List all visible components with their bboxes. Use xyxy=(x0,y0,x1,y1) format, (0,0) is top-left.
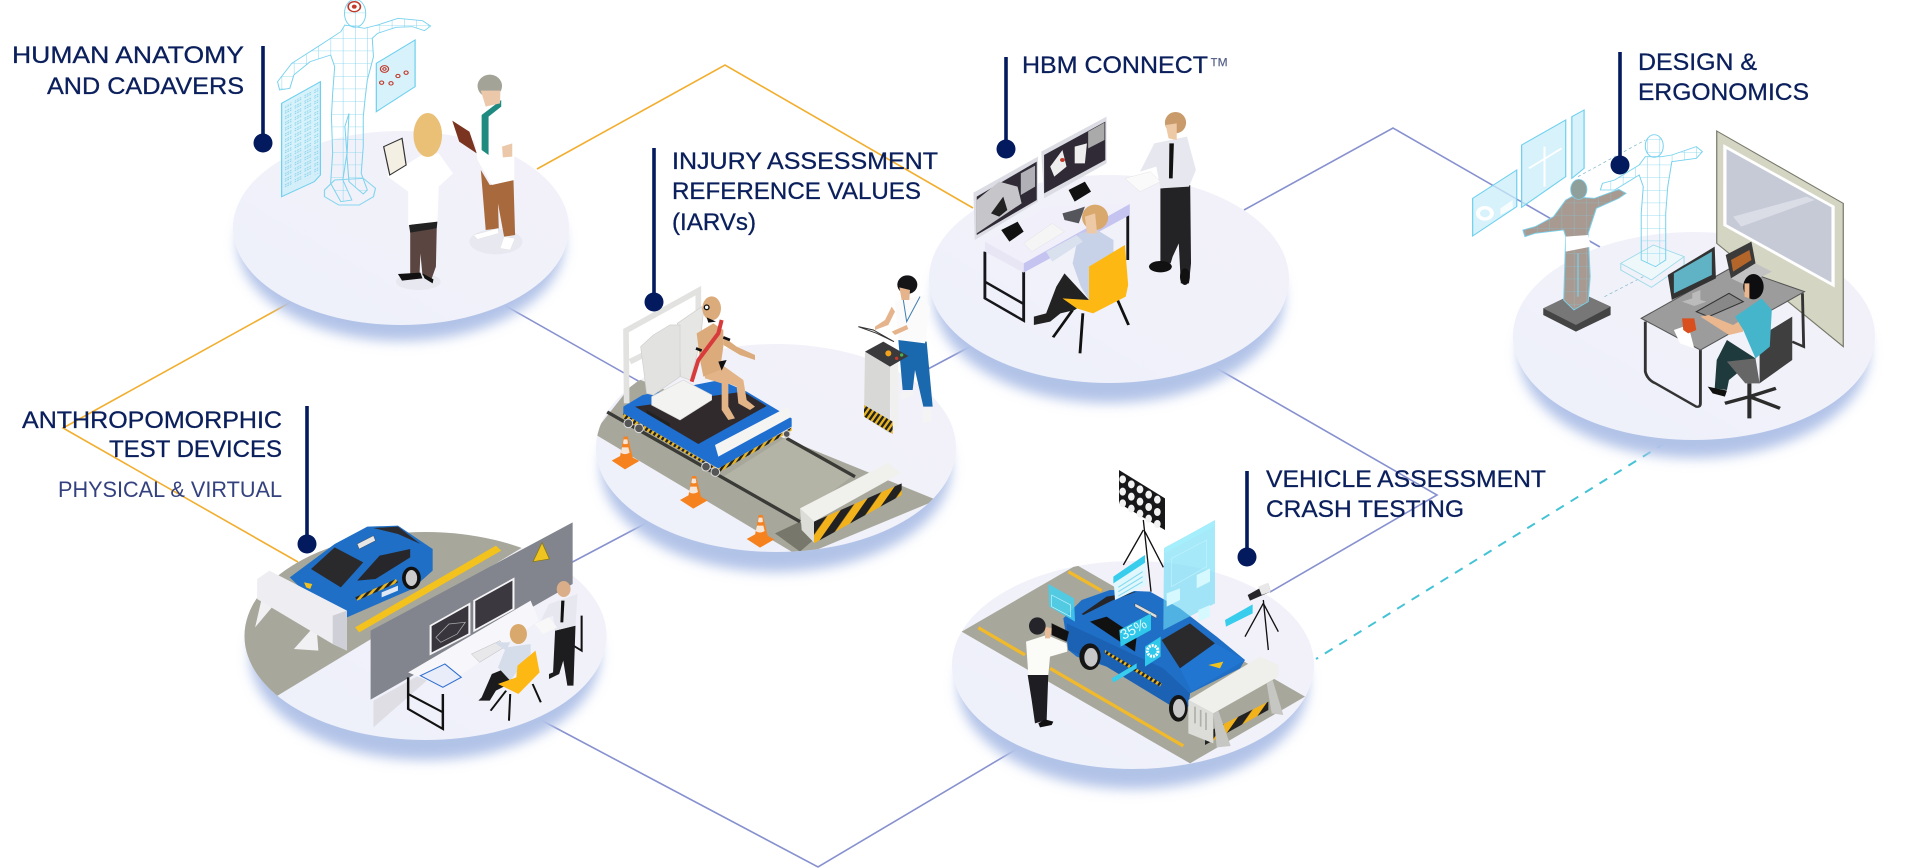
panel: vehicle assessment disc xyxy=(952,470,1314,789)
test track road xyxy=(593,378,937,557)
figure: engineer with tablet xyxy=(1026,617,1069,727)
pin: injury assessment xyxy=(644,148,664,312)
icon: physical body scan figure on dark platform xyxy=(1523,179,1626,332)
figure: standing engineer xyxy=(535,581,582,686)
blue crash test car xyxy=(290,526,433,617)
light array on tripod xyxy=(1119,470,1165,592)
sled platform xyxy=(623,380,792,476)
blue crash test vehicle xyxy=(1063,590,1245,722)
crash test dummy with seat belt xyxy=(692,296,755,420)
subheading: physical and virtual: PHYSICAL & VIRTUAL xyxy=(58,477,282,502)
road surface xyxy=(244,532,522,696)
figure: female doctor xyxy=(384,113,453,290)
heading: human anatomy and cadavers: HUMAN ANATOMY xyxy=(12,42,244,69)
panel: human anatomy and cadavers disc xyxy=(233,0,569,341)
heading: injury assessment reference values: INJURY ASSESSMENT xyxy=(672,148,938,175)
pin: vehicle assessment xyxy=(1238,471,1256,566)
heading: anthropomorphic test devices: TEST DEVICES xyxy=(109,436,282,463)
icon: wireframe mannequin on scale xyxy=(1600,135,1702,287)
heading: injury assessment reference values: (IARVs) xyxy=(672,209,756,236)
heading: human anatomy and cadavers: AND CADAVERS xyxy=(47,73,244,100)
seat and frame xyxy=(626,291,712,420)
heading: anthropomorphic test devices xyxy=(22,407,282,463)
monitors showing crash scans xyxy=(973,117,1107,242)
figure: standing supervisor xyxy=(1125,112,1196,285)
cones xyxy=(612,437,774,548)
pin: design and ergonomics xyxy=(1610,52,1630,174)
heading: injury assessment reference values: REFERENCE VALUES xyxy=(672,178,921,205)
heading: vehicle assessment crash testing: CRASH TESTING xyxy=(1266,496,1464,523)
panel: HBM Connect disc xyxy=(929,112,1289,403)
label: 35% readout: 35% xyxy=(1117,615,1149,643)
wall with window xyxy=(1717,131,1843,347)
panel: anthropomorphic test devices disc xyxy=(204,522,606,760)
heading: vehicle assessment crash testing xyxy=(1266,466,1546,523)
heading: human anatomy and cadavers xyxy=(12,42,244,100)
icon: mesh human model xyxy=(278,0,431,205)
icon: target map panel xyxy=(376,40,415,112)
pin: HBM connect xyxy=(996,57,1016,158)
video camera on tripod xyxy=(1245,583,1278,650)
panel: injury assessment disc xyxy=(593,275,956,572)
connector lines: orange anatomy network xyxy=(63,65,973,562)
heading: HBM Connect: ™ xyxy=(1209,53,1229,78)
control room wall with warning sign xyxy=(371,522,573,727)
pin: human anatomy xyxy=(254,46,272,152)
connector line: teal dashed link xyxy=(1316,443,1665,659)
white impact barrier with hazard stripes xyxy=(800,463,902,543)
white impact barrier xyxy=(255,571,347,651)
white barrier with hazard stripes xyxy=(1188,657,1283,747)
heading: injury assessment reference values xyxy=(672,148,938,236)
monitors showing car models xyxy=(431,579,513,656)
heading: design and ergonomics xyxy=(1638,49,1809,106)
holographic data overlays xyxy=(1048,520,1253,683)
heading: vehicle assessment crash testing: VEHICLE ASSESSMENT xyxy=(1266,466,1546,493)
heading: anthropomorphic test devices: ANTHROPOMORPHIC xyxy=(22,407,282,434)
road with lane markings xyxy=(962,565,1305,763)
figure: seated engineer xyxy=(478,624,541,721)
desk with keyboard xyxy=(985,203,1130,321)
figure: seated analyst on yellow chair xyxy=(1034,205,1129,353)
desk with keyboard and binder xyxy=(408,601,539,729)
icon: binary data panel xyxy=(282,82,320,197)
heading: HBM Connect: HBM CONNECT xyxy=(1022,52,1208,79)
heading: design and ergonomics: ERGONOMICS xyxy=(1638,79,1809,106)
workstation desk with monitor, laptop and mug xyxy=(1641,242,1804,407)
figure: male doctor xyxy=(452,75,529,254)
figure: technician with tablet xyxy=(858,275,933,423)
pin: anthropomorphic test devices xyxy=(298,406,316,554)
figure: seated designer on office chair xyxy=(1700,274,1792,418)
heading: design and ergonomics: DESIGN & xyxy=(1638,49,1757,76)
panel: design and ergonomics disc xyxy=(1473,110,1875,458)
connector lines: blue process network xyxy=(504,128,1600,867)
control console xyxy=(864,342,908,434)
holographic data panels xyxy=(1473,110,1645,297)
